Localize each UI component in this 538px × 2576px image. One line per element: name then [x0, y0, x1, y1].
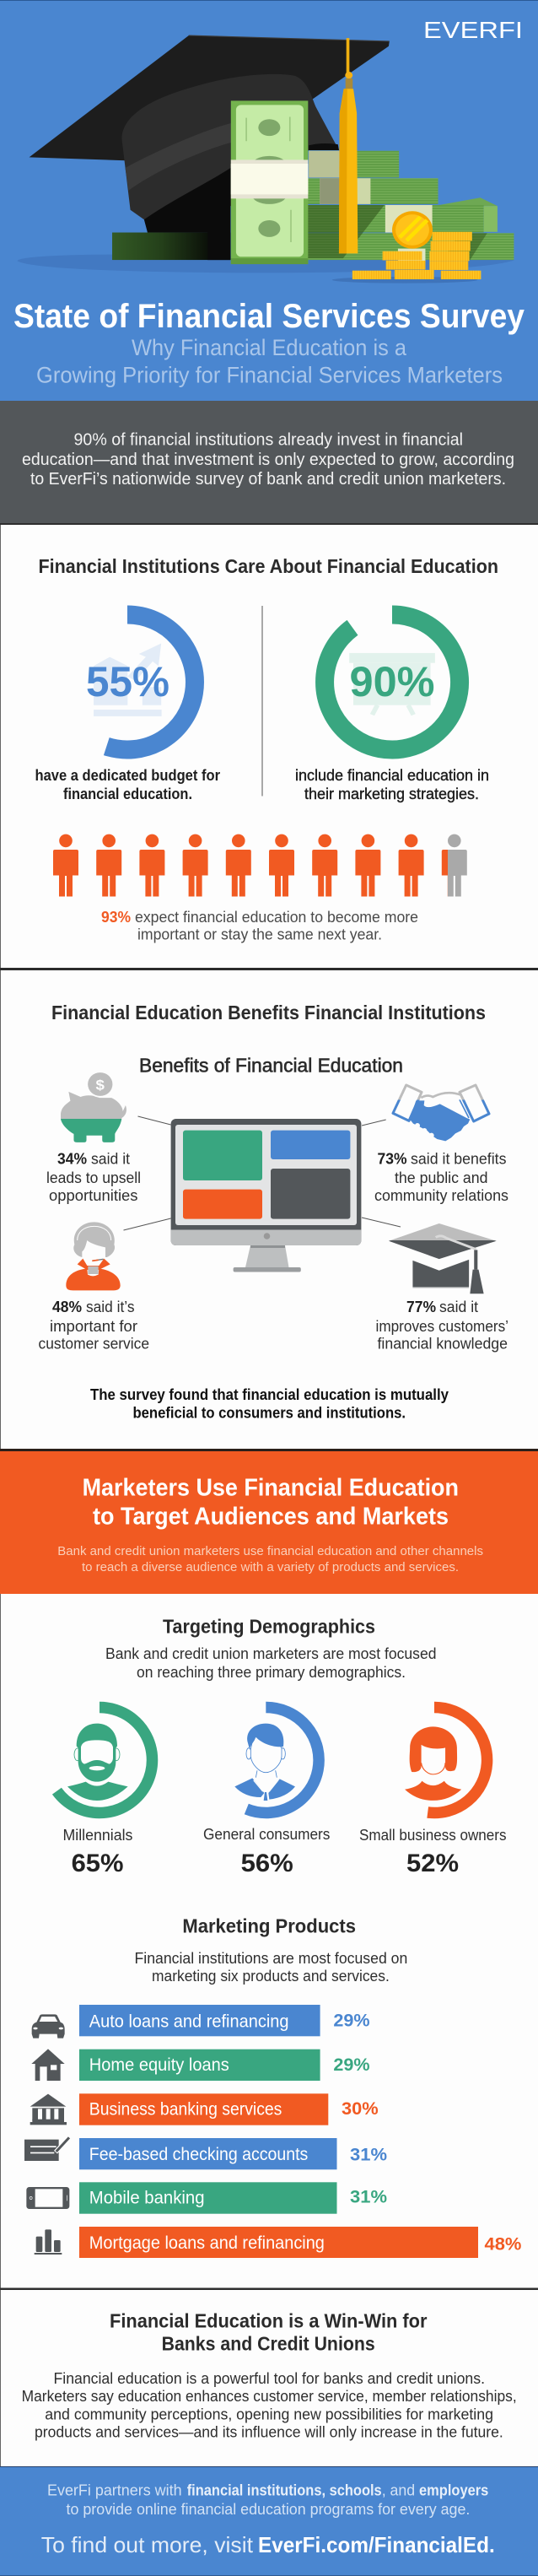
conclusion: The survey found that financial education is mutually	[90, 1386, 449, 1403]
panel: marketers banner	[0, 1449, 538, 1594]
demographic: small business owners: 52%	[406, 1850, 459, 1877]
text: 73%: the public and	[395, 1169, 487, 1186]
demographic: millennials	[56, 1708, 152, 1877]
bar: auto loans: 29%	[333, 2011, 370, 2031]
connector lines	[123, 1116, 401, 1230]
text: 77%	[376, 1299, 508, 1353]
bar: fee-based checking	[79, 2138, 387, 2169]
text: products intro: marketing six products and services.	[152, 1968, 390, 1985]
callout: 93%: expect financial education to become more	[135, 909, 418, 926]
demographic: small business owners	[359, 1708, 506, 1877]
text: products intro	[135, 1950, 407, 1985]
bar: home equity	[79, 2049, 370, 2081]
text: 73%: 73%	[378, 1151, 406, 1168]
text: demographics intro	[105, 1645, 437, 1681]
banner text: Bank and credit union marketers use financial education and other channels	[57, 1544, 483, 1558]
call to action	[41, 2532, 495, 2557]
bar: fee-based checking: Fee-based checking accounts	[89, 2145, 308, 2164]
bar: business banking: Business banking services	[89, 2100, 282, 2120]
divider	[261, 606, 263, 797]
sub-heading: Benefits of Financial Education	[139, 1055, 403, 1077]
banner text: to reach a diverse audience with a variety of products and services.	[82, 1560, 459, 1574]
heading: Banks and Credit Unions	[162, 2333, 375, 2355]
bar: auto loans	[79, 2005, 370, 2036]
banner heading: to Target Audiences and Markets	[93, 1503, 449, 1530]
conclusion	[90, 1386, 449, 1422]
icon: piggy bank	[61, 1071, 126, 1142]
bar: business banking	[79, 2093, 379, 2125]
text: 34%: said it	[91, 1151, 130, 1168]
text: demographics intro: on reaching three primary demographics.	[137, 1664, 406, 1681]
icon: customer service agent	[66, 1222, 121, 1290]
panel: benefits	[0, 968, 538, 1451]
bar: mobile banking: Mobile banking	[89, 2189, 204, 2208]
bar: mortgage loans: 48%	[484, 2234, 521, 2255]
footer text: to provide online financial education programs for every age.	[66, 2501, 470, 2518]
paragraph: and community perceptions, opening new possibilities for marketing	[45, 2406, 493, 2423]
panel: hero header	[0, 0, 538, 401]
caption: budget: financial education.	[63, 786, 192, 802]
demographic: general consumers	[203, 1707, 330, 1877]
footer text: financial institutions, schools	[187, 2482, 382, 2499]
callout: 93%: 93%	[101, 909, 131, 926]
heading: Financial Institutions Care About Financial Education	[39, 555, 498, 577]
bar: mobile banking: 31%	[350, 2187, 387, 2207]
text: 34%: opportunities	[49, 1187, 138, 1204]
conclusion: beneficial to consumers and institutions.	[133, 1405, 406, 1422]
bar: fee-based checking: 31%	[350, 2145, 387, 2165]
heading	[110, 2309, 428, 2355]
heading: Financial Education is a Win-Win for	[110, 2309, 428, 2331]
panel: targeting and products	[0, 1594, 538, 2288]
callout: 93%	[101, 909, 418, 943]
paragraph	[22, 2370, 517, 2441]
intro paragraph: education—and that investment is only expected to grow, according	[22, 451, 514, 469]
panel: intro text	[0, 401, 538, 525]
caption: budget: have a dedicated budget for	[35, 767, 220, 784]
text: 73%: community relations	[374, 1187, 508, 1204]
bar: business banking: 30%	[342, 2098, 379, 2119]
caption: budget	[35, 767, 220, 802]
text: 77%: 77%	[406, 1299, 436, 1315]
heading: marketing products: Marketing Products	[182, 1915, 356, 1937]
text: 48%: said it’s	[86, 1299, 135, 1315]
text: products intro: Financial institutions are most focused on	[135, 1950, 407, 1967]
footer text	[47, 2482, 488, 2518]
icons: products	[24, 2014, 69, 2255]
logo: EVERFI	[423, 17, 523, 43]
text: 77%: improves customers’	[376, 1318, 508, 1335]
text: 48%: customer service	[39, 1336, 149, 1353]
intro paragraph	[22, 430, 514, 489]
icon: computer monitor	[171, 1119, 361, 1272]
demographic: millennials: Millennials	[62, 1827, 132, 1844]
panel: footer	[0, 2466, 538, 2576]
heading: targeting demographics: Targeting Demographics	[163, 1616, 375, 1638]
banner heading	[83, 1475, 459, 1530]
bar: home equity: 29%	[333, 2055, 370, 2075]
text: 48%: important for	[50, 1318, 137, 1335]
bar: auto loans: Auto loans and refinancing	[89, 2012, 288, 2032]
donut chart: 90%: 90%	[349, 658, 435, 705]
text: 48%: 48%	[52, 1299, 82, 1315]
icon: handshake	[393, 1085, 489, 1141]
text: 34%	[46, 1151, 141, 1204]
text: 73%	[374, 1151, 508, 1204]
caption: marketing: include financial education in	[295, 767, 489, 784]
panel: win-win	[0, 2288, 538, 2467]
donut chart: 90%	[325, 614, 460, 749]
text: 48%	[39, 1299, 149, 1353]
paragraph: products and services—and its influence will only increase in the future.	[35, 2424, 503, 2441]
footer text: employers	[419, 2482, 488, 2499]
panel: financial institutions care	[0, 525, 538, 968]
bar: mobile banking	[79, 2182, 387, 2214]
call to action: To find out more, visit	[41, 2532, 254, 2557]
bar: mortgage loans	[79, 2227, 521, 2258]
caption: marketing: their marketing strategies.	[304, 786, 479, 802]
icon: graduation cap	[389, 1223, 497, 1293]
text: 34%: leads to upsell	[46, 1169, 141, 1186]
paragraph: Financial education is a powerful tool for banks and credit unions.	[54, 2370, 485, 2387]
demographic: general consumers: 56%	[241, 1850, 293, 1877]
text: 77%: said it	[439, 1299, 478, 1315]
bar: mortgage loans: Mortgage loans and refinancing	[89, 2233, 325, 2253]
banner heading: Marketers Use Financial Education	[83, 1475, 459, 1502]
subtitle: Why Financial Education is a	[132, 335, 407, 360]
footer text: , and	[382, 2482, 415, 2499]
text: demographics intro: Bank and credit union marketers are most focused	[105, 1645, 437, 1662]
heading: Financial Education Benefits Financial Institutions	[51, 1002, 486, 1023]
banner text	[57, 1544, 483, 1574]
caption: marketing	[295, 767, 489, 802]
subtitle: Growing Priority for Financial Services Marketers	[36, 363, 503, 388]
donut chart: 55%: 55%	[86, 658, 169, 705]
donut chart: 55%	[86, 614, 195, 749]
demographic: millennials: 65%	[72, 1850, 123, 1877]
people pictogram: 93%	[53, 834, 467, 896]
paragraph: Marketers say education enhances customer service, member relationships,	[22, 2388, 517, 2405]
text: 34%: 34%	[57, 1151, 87, 1168]
text: 77%: financial knowledge	[378, 1336, 508, 1353]
intro paragraph: to EverFi’s nationwide survey of bank and credit union marketers.	[30, 470, 506, 489]
demographic: small business owners: Small business owners	[359, 1827, 506, 1844]
demographic: general consumers: General consumers	[203, 1826, 330, 1843]
text: 73%: said it benefits	[411, 1151, 506, 1168]
callout: 93%: important or stay the same next year.	[137, 926, 382, 943]
call to action: EverFi.com/FinancialEd.	[258, 2532, 495, 2557]
bar: home equity: Home equity loans	[89, 2055, 229, 2075]
subtitle	[36, 335, 503, 388]
illustration: graduation cap and money	[17, 35, 514, 284]
footer text: EverFi partners with	[47, 2482, 182, 2499]
intro paragraph: 90% of financial institutions already invest in financial	[74, 430, 463, 449]
icon: piggy bank: $	[96, 1077, 105, 1093]
